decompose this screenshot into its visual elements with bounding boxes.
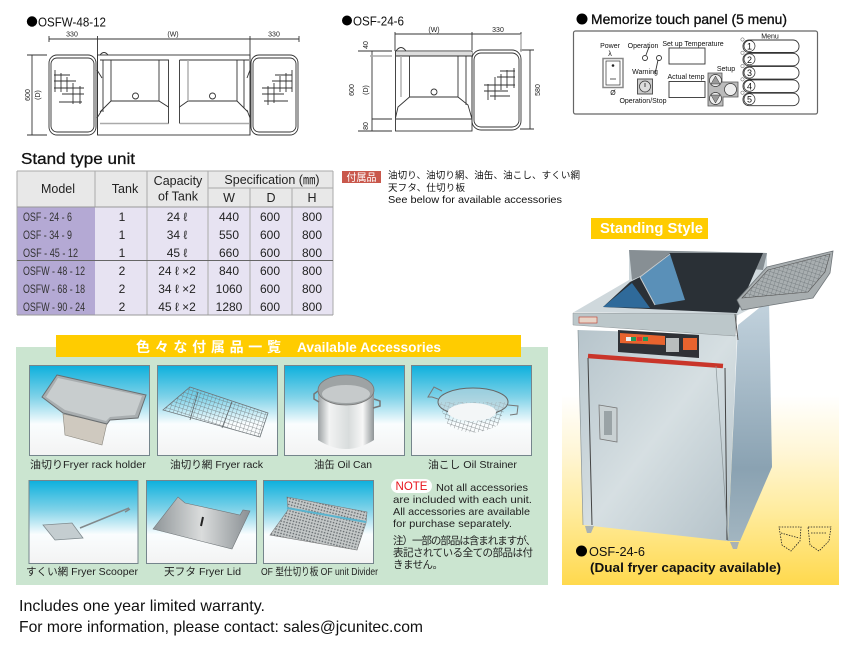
photo: fryer rack [158,366,278,471]
touch panel diagram: Power [600,43,621,50]
table: specifications: 840 [219,264,239,278]
touch panel diagram [574,11,818,114]
panel: standing style [562,218,839,585]
drawing: OSF-24-6: 330 [492,27,504,34]
callout: note: 注）一部の部品は含まれますが、 [393,534,536,547]
table: specifications: of Tank [158,190,199,204]
caption: model: (Dual fryer capacity available) [590,560,781,575]
callout: note [391,479,536,571]
photo: oil strainer: 油こし Oil Strainer [428,458,518,471]
table: specifications: 1 [119,246,126,260]
drawing: OSF-24-6: 580 [535,84,542,96]
touch panel diagram: Setup [717,66,735,73]
touch panel diagram: Warning [632,69,658,76]
table: specifications [17,171,333,315]
photo: fryer lid: 天フタ Fryer Lid [164,566,241,578]
accessories note: See below for available accessories [388,194,562,206]
table: specifications: OSF - 45 - 12 [23,246,78,260]
touch panel diagram: Operation/Stop [619,98,667,105]
touch panel diagram: 4 [747,81,752,91]
touch panel diagram: Menu [761,34,779,40]
touch panel diagram: 5 [747,95,752,105]
table: specifications: 800 [302,246,322,260]
drawing: OSFW-48-12: (D) [35,90,42,100]
table: specifications: 1060 [216,282,243,296]
touch panel diagram: Memorize touch panel (5 menu) [591,11,787,27]
table: specifications: 660 [219,246,239,260]
table: specifications: 34 ℓ [167,228,187,242]
callout: note: for purchase separately. [393,518,512,530]
drawing: OSFW-48-12: 330 [66,32,78,38]
table: specifications: W [223,191,235,205]
table: specifications: 45 ℓ ×2 [158,300,196,314]
accessories note: 付属品 [346,171,376,184]
footer: warranty and contact [19,598,423,636]
callout: note: All accessories are available [393,506,530,518]
touch panel diagram: λ [608,51,612,58]
drawing: OSFW-48-12: OSFW-48-12 [38,16,106,30]
callout: note: 表記されている全ての部品は付 [393,546,533,559]
callout: note: Not all accessories [436,482,528,494]
drawing: OSF-24-6: 600 [349,84,356,96]
photo: fryer unit [573,250,833,549]
table: specifications: 2 [119,282,126,296]
banner: accessories title: Available Accessories [297,339,441,355]
photo: fryer rack holder: 油切りFryer rack holder [30,458,147,471]
table: specifications: 1 [119,228,126,242]
drawing: OSF-24-6: 80 [363,122,370,130]
table: specifications: Capacity [154,174,203,188]
table: specifications: 800 [302,228,322,242]
drawing: OSFW-48-12 [25,16,299,135]
touch panel diagram: Ø [610,90,616,97]
touch panel diagram: 1 [747,42,752,52]
photo: OF unit divider: OF 型仕切り板 OF unit Divider [261,565,378,578]
table: specifications: OSFW - 90 - 24 [23,300,85,314]
banner: standing style: Standing Style [600,221,703,237]
accessories note [342,170,580,206]
table: specifications: 24 ℓ [167,210,187,224]
callout: note: NOTE [396,481,428,493]
table: specifications: 440 [219,210,239,224]
table: specifications: 550 [219,228,239,242]
table: specifications: OSFW - 68 - 18 [23,282,85,296]
photo: fryer rack: 油切り網 Fryer rack [170,458,264,471]
drawing: OSF-24-6: OSF-24-6 [353,14,404,28]
drawing: OSF-24-6: (D) [363,85,370,95]
caption: model [576,544,781,575]
banner: standing style [591,218,708,239]
footer: warranty and contact: Includes one year limited warranty. [19,598,265,615]
drawing: OSFW-48-12: (W) [167,32,179,38]
table: specifications: OSF - 24 - 6 [23,210,72,224]
table: specifications: H [307,191,317,205]
table: specifications: 600 [260,210,280,224]
table: specifications: 600 [260,246,280,260]
table: specifications: 2 [119,300,126,314]
accessories note: 天フタ、仕切り板 [388,182,465,194]
drawing: OSF-24-6: 40 [363,41,370,49]
table: specifications: 800 [302,300,322,314]
drawing: OSF-24-6 [342,14,542,131]
photo: fryer lid [146,480,256,578]
table: specifications: D [266,191,276,205]
table: specifications: 800 [302,264,322,278]
table: specifications: 600 [260,282,280,296]
photo: fryer scooper [26,480,138,578]
photo: oil can [284,366,404,471]
table: specifications: OSF - 34 - 9 [23,228,72,242]
table: specifications: 600 [260,300,280,314]
callout: note: きません。 [393,559,443,571]
table: specifications: 24 ℓ ×2 [158,264,196,278]
photo: fryer scooper: すくい網 Fryer Scooper [26,565,138,578]
touch panel diagram: Actual temp [668,74,705,81]
drawing: OSFW-48-12: 600 [25,89,32,101]
photo: oil can: 油缶 Oil Can [314,458,372,471]
touch panel diagram: Operation [628,43,658,50]
table: specifications: 2 [119,264,126,278]
table: specifications: Tank [112,182,139,196]
banner: accessories title [56,335,521,357]
table: specifications: 34 ℓ ×2 [158,282,196,296]
photo: OF unit divider [261,480,378,578]
table: specifications: 800 [302,282,322,296]
heading: stand type unit: Stand type unit [21,151,136,168]
table: specifications: 1 [119,210,126,224]
table: specifications: 800 [302,210,322,224]
drawing: OSFW-48-12: 330 [268,32,280,38]
touch panel diagram: 2 [747,55,752,65]
table: specifications: Specification (㎜) [224,173,320,187]
table: specifications: 1280 [216,300,243,314]
table: specifications: 45 ℓ [167,246,187,260]
footer: warranty and contact: For more information, please contact: sales@jcunitec.com [19,619,423,636]
touch panel diagram: 3 [747,68,752,78]
touch panel diagram: Set up Temperature [662,41,724,48]
table: specifications: Model [41,182,75,196]
icon: certification marks [779,527,831,551]
accessories note: 油切り、油切り網、油缶、油こし、すくい網 [388,170,580,182]
table: specifications: 600 [260,228,280,242]
table: specifications: 600 [260,264,280,278]
table: specifications: OSFW - 48 - 12 [23,264,85,278]
drawing: OSF-24-6: (W) [428,27,440,34]
photo: fryer rack holder [30,366,150,471]
banner: accessories title: 色々な付属品一覧 [136,339,281,355]
callout: note: are included with each unit. [393,494,532,506]
caption: model: OSF-24-6 [589,544,645,559]
panel: available accessories [16,335,548,585]
photo: oil strainer [412,366,532,471]
